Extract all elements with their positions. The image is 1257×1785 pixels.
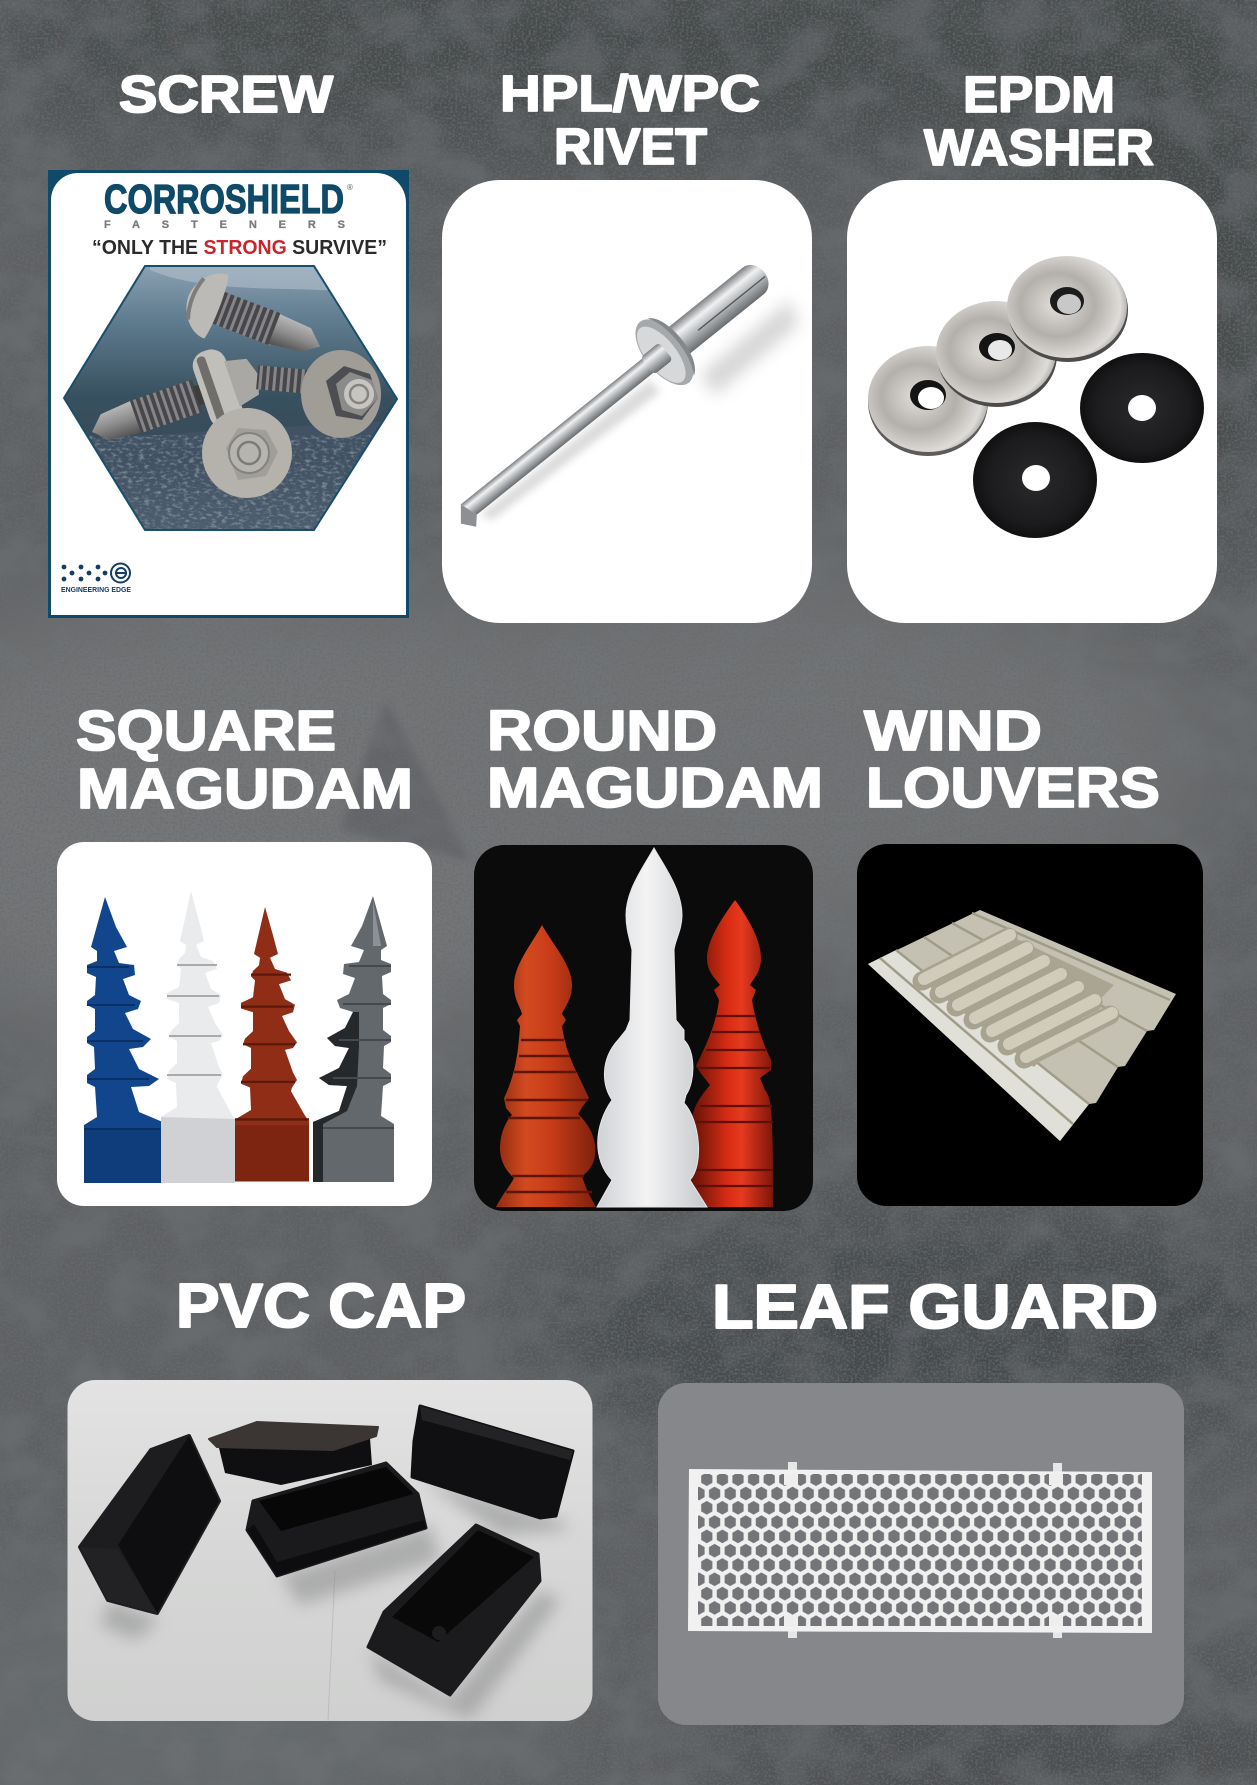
heading: wind louvers: WIND — [864, 699, 1042, 763]
panel: square magudam — [57, 699, 432, 1206]
icon: cap left — [80, 1436, 219, 1613]
icon: metal washer 1 — [868, 346, 988, 456]
icon: right red finial — [690, 900, 773, 1207]
icon: washer screw — [92, 349, 259, 440]
icon: rubber washer 2 — [973, 422, 1097, 538]
icon: blue spire — [84, 897, 165, 1183]
heading: square magudam: MAGUDAM — [77, 757, 413, 821]
image card: leaf guard — [658, 1383, 1184, 1725]
icon: bottom hex-head screw — [202, 408, 292, 498]
poster: corroshield fasteners — [48, 170, 409, 618]
icon: white finial — [597, 848, 707, 1207]
icon: cap top middle — [209, 1422, 378, 1485]
heading: square magudam — [76, 699, 413, 821]
engineering edge logo: ENGINEERING EDGE — [61, 585, 131, 594]
heading: round magudam — [487, 699, 823, 820]
icon: cap right top — [412, 1406, 573, 1518]
image card: square magudam — [57, 842, 432, 1206]
brand name: FASTENERS — [104, 219, 345, 231]
icon: right hex-head screw — [256, 350, 381, 438]
image card: pvc caps — [68, 1380, 592, 1721]
heading: leaf guard: LEAF GUARD — [712, 1273, 1158, 1342]
icon: grey spire — [313, 896, 394, 1182]
icon: red spire — [235, 907, 309, 1181]
icon: rubber washer 1 — [1080, 353, 1204, 463]
image card: washers — [847, 180, 1217, 623]
image card: round magudam — [474, 845, 813, 1211]
heading: screw: SCREW — [119, 66, 334, 124]
slogan: “ONLY THE STRONG SURVIVE” — [92, 237, 387, 259]
heading: epdm washer: WASHER — [924, 119, 1154, 176]
icon: metal washer 3 — [1007, 256, 1128, 362]
heading: hpl/wpc rivet — [500, 65, 760, 175]
icon: rivet — [433, 242, 789, 549]
panel: wind louvers — [857, 699, 1203, 1206]
heading: wind louvers — [864, 699, 1160, 820]
panel: pvc cap — [68, 1272, 592, 1721]
heading: round magudam: MAGUDAM — [487, 756, 823, 820]
heading: epdm washer — [924, 66, 1154, 176]
brand name: CORROSHIELD — [104, 176, 344, 222]
panel: round magudam — [474, 699, 823, 1211]
heading: round magudam: ROUND — [487, 699, 717, 763]
engineering edge logo — [61, 564, 131, 594]
heading: hpl/wpc rivet: RIVET — [554, 118, 707, 175]
panel: hpl/wpc rivet — [433, 65, 812, 623]
heading: pvc cap: PVC CAP — [176, 1272, 466, 1341]
icon: top self-drilling screw — [186, 274, 320, 352]
heading: epdm washer: EPDM — [963, 66, 1115, 123]
panel: leaf guard — [658, 1273, 1184, 1725]
icon: metal washer 2 — [936, 301, 1057, 407]
image card: wind louvers — [857, 844, 1203, 1206]
heading: hpl/wpc rivet: HPL/WPC — [500, 65, 760, 122]
icon: white spire — [161, 891, 235, 1183]
heading: square magudam: SQUARE — [76, 699, 336, 763]
brand name: ® — [347, 183, 353, 192]
panel: screw — [48, 66, 409, 618]
icon: hexagonal mesh guard — [688, 1462, 1152, 1638]
icon: cap bottom right — [368, 1525, 540, 1695]
icon: left red finial — [496, 925, 596, 1207]
image card: rivet — [433, 180, 812, 623]
panel: epdm washer — [847, 66, 1217, 623]
heading: wind louvers: LOUVERS — [866, 756, 1160, 820]
icon: louver sheet — [868, 910, 1176, 1141]
icon: cap centre — [247, 1463, 426, 1576]
hexagon photo of screws — [60, 262, 400, 535]
